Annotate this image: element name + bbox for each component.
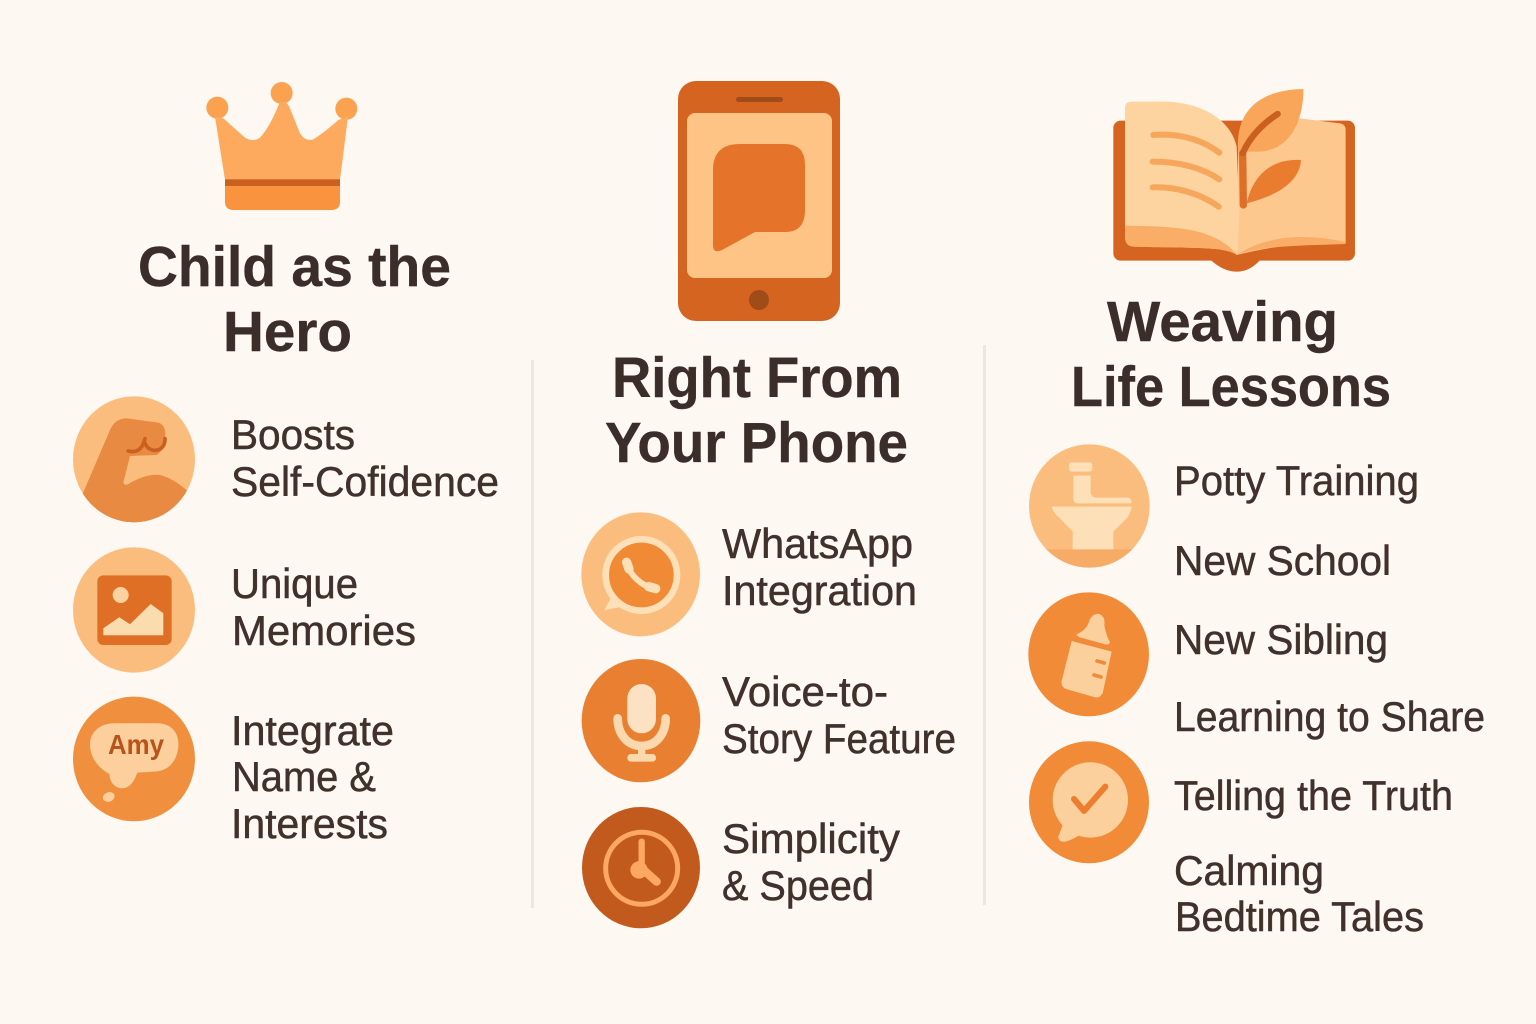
icon: crown <box>206 82 357 210</box>
icon: speech bubble with check <box>1029 741 1149 863</box>
icon: microphone <box>582 659 700 782</box>
label: simplicity and speed <box>722 815 900 909</box>
panel: right from your phone <box>581 81 956 928</box>
label: unique memories: Unique <box>231 560 358 607</box>
label: whatsapp integration: Integration <box>722 567 917 614</box>
icon: clock <box>582 807 700 928</box>
label: boosts self-confidence: Self-Cofidence <box>231 458 499 505</box>
icon: open book with leaves <box>1113 89 1355 272</box>
heading: child as the hero: Child as the <box>138 235 451 299</box>
label: simplicity and speed: Simplicity <box>722 815 900 862</box>
heading: child as the hero <box>138 235 451 364</box>
heading: right from your phone <box>605 346 908 475</box>
label: boosts self-confidence: Boosts <box>231 411 355 458</box>
label: integrate name and interests <box>231 707 394 847</box>
icon: baby bottle <box>1028 592 1149 716</box>
heading: right from your phone: Right From <box>612 346 902 410</box>
label: boosts self-confidence <box>231 411 499 505</box>
label: voice-to-story feature: Voice-to- <box>722 668 888 715</box>
label: unique memories <box>231 560 416 654</box>
label: integrate name and interests: Name & <box>232 753 376 800</box>
panel: weaving life lessons <box>1027 89 1485 940</box>
heading: weaving life lessons: Life Lessons <box>1071 355 1391 419</box>
label: integrate name and interests: Interests <box>231 800 388 847</box>
label: calming bedtime tales: Calming <box>1174 847 1324 894</box>
label: calming bedtime tales: Bedtime Tales <box>1175 893 1424 940</box>
heading: child as the hero: Hero <box>223 300 352 364</box>
icon: toilet <box>1027 444 1153 569</box>
label: integrate name and interests: Integrate <box>231 707 394 754</box>
label: new sibling: New Sibling <box>1174 616 1388 663</box>
label: unique memories: Memories <box>232 607 416 654</box>
heading: weaving life lessons <box>1071 290 1391 419</box>
icon: whatsapp <box>581 512 700 636</box>
label: whatsapp integration: WhatsApp <box>722 520 913 567</box>
panel: child as the hero <box>73 82 499 847</box>
label: simplicity and speed: & Speed <box>722 862 874 909</box>
icon: picture <box>73 547 195 673</box>
label: voice-to-story feature: Story Feature <box>722 715 956 762</box>
label: whatsapp integration <box>722 520 917 614</box>
label: voice-to-story feature <box>722 668 956 762</box>
label: potty training: Potty Training <box>1174 457 1419 504</box>
label: learning to share: Learning to Share <box>1174 693 1485 740</box>
heading: right from your phone: Your Phone <box>605 411 908 475</box>
icon: name bubble: Amy <box>108 729 164 760</box>
icon: phone with chat bubble <box>678 81 840 321</box>
icon: name bubble <box>73 697 195 821</box>
label: calming bedtime tales <box>1174 847 1424 940</box>
icon: flexed arm <box>73 396 195 527</box>
heading: weaving life lessons: Weaving <box>1107 290 1338 354</box>
label: telling the truth: Telling the Truth <box>1174 772 1453 819</box>
label: new school: New School <box>1174 537 1391 584</box>
